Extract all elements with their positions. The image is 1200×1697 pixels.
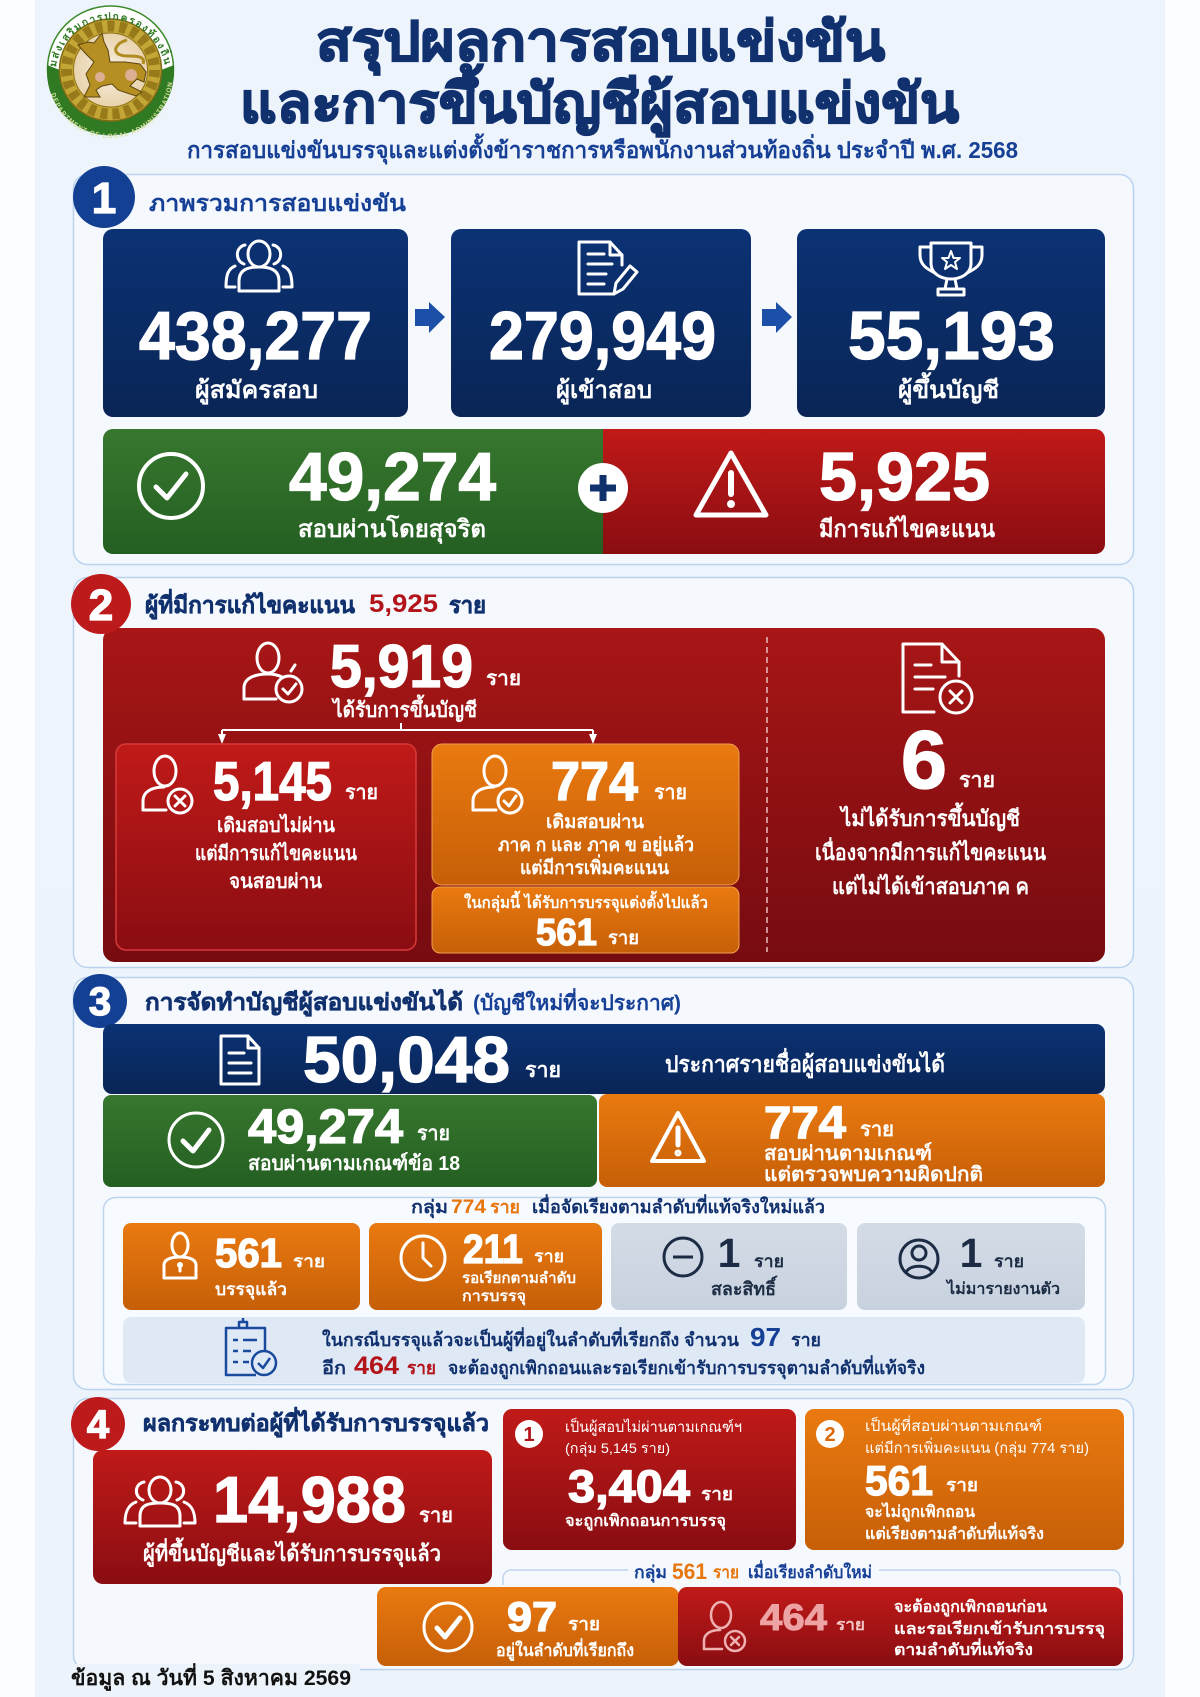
breakdown heading: กลุ่ม <box>411 1197 448 1219</box>
card: 211 waiting: 211 <box>463 1226 523 1272</box>
banner: passed honestly <box>103 429 603 554</box>
divider label: group 561: กลุ่ม <box>634 1563 667 1583</box>
card: 774: แต่มีการเพิ่มคะแนน <box>520 854 669 879</box>
bar: 50,048: ราย <box>525 1059 561 1082</box>
number badge 1 <box>515 1420 543 1448</box>
note box: จะต้องถูกเพิกถอนและรอเรียกเข้ารับการบรรจุตามลำดับที่แท้จริง <box>448 1355 925 1380</box>
heading: edited scores: ผู้ที่มีการแก้ไขคะแนน <box>145 588 355 620</box>
block: 6 not listed: ไม่ได้รับการขึ้นบัญชี <box>839 802 1020 832</box>
card: 464: และรอเรียกเข้ารับการบรรจุ <box>894 1619 1105 1639</box>
title: และการขึ้นบัญชีผู้สอบแข่งขัน <box>240 64 959 137</box>
card: 5,145: จนสอบผ่าน <box>229 871 322 893</box>
icon: user check <box>244 643 302 702</box>
card: 464: 464 <box>760 1597 827 1638</box>
number badge 2 <box>816 1420 844 1448</box>
subtitle: การสอบแข่งขันบรรจุและแต่งตั้งข้าราชการหรือพนักงานส่วนท้องถิ่น ประจำปี พ.ศ. 2568 <box>187 133 1018 165</box>
note box: 97 <box>750 1322 781 1352</box>
card: 561 placed <box>123 1223 360 1310</box>
card: listed: 55,193 <box>848 298 1055 374</box>
divider label: group 561 <box>503 1559 1120 1585</box>
heading: impact: ผลกระทบต่อผู้ที่ได้รับการบรรจุแล้ว <box>143 1406 489 1438</box>
card: item 1: จะถูกเพิกถอนการบรรจุ <box>565 1512 726 1532</box>
card: 561 appointed <box>432 887 739 954</box>
title <box>240 12 959 137</box>
note box <box>123 1317 1085 1383</box>
main red card: 5,919 <box>330 633 473 700</box>
icon: warning triangle <box>652 1113 704 1161</box>
card: 211 waiting: การบรรจุ <box>462 1288 526 1306</box>
panel: section 3 <box>73 974 1134 1390</box>
card: applicants <box>103 229 408 417</box>
card: 774 irregular: ราย <box>860 1119 894 1141</box>
bar: 50,048 <box>103 1023 1105 1096</box>
card: 561 appointed: ราย <box>608 928 639 949</box>
card: 14,988: 14,988 <box>213 1463 406 1536</box>
card: item 2: 561 <box>865 1457 933 1504</box>
heading: edited scores: 5,925 <box>369 590 438 618</box>
icon: people <box>226 241 292 291</box>
breakdown heading: ราย <box>490 1197 520 1217</box>
heading: overview: ภาพรวมการสอบแข่งขัน <box>149 190 406 216</box>
card: item 1 <box>503 1409 796 1550</box>
icon: user circle <box>900 1240 938 1278</box>
card: 774 irregular: สอบผ่านตามเกณฑ์ <box>764 1142 932 1165</box>
badge 4: 4 <box>87 1403 110 1447</box>
card: 1 no show: 1 <box>960 1230 982 1276</box>
card: 5,145: เดิมสอบไม่ผ่าน <box>217 813 335 837</box>
card: 774: เดิมสอบผ่าน <box>546 812 644 833</box>
icon: clipboard <box>226 1318 276 1375</box>
card: 464: จะต้องถูกเพิกถอนก่อน <box>894 1598 1047 1618</box>
card: 464: ตามลำดับที่แท้จริง <box>894 1638 1033 1659</box>
badge 4 <box>71 1397 125 1451</box>
card: 211 waiting: รอเรียกตามลำดับ <box>462 1270 576 1287</box>
icon: user x <box>704 1602 745 1651</box>
icon: warning triangle <box>696 453 766 515</box>
icon: document x <box>903 644 972 713</box>
card: 561 placed: บรรจุแล้ว <box>215 1280 287 1300</box>
icon: user lock <box>164 1233 196 1278</box>
card: 774: ภาค ก และ ภาค ข อยู่แล้ว <box>498 834 694 857</box>
card: 1 no show: ราย <box>994 1252 1024 1271</box>
card: 774 irregular: แต่ตรวจพบความผิดปกติ <box>764 1164 983 1186</box>
main red card: ราย <box>486 668 521 690</box>
card: 561 appointed: ในกลุ่มนี้ ได้รับการบรรจุแต่งตั้งไปแล้ว <box>464 890 708 913</box>
logo: department seal: กรมส่งเสริมการปกครองท้องถิ่น <box>50 12 172 66</box>
block: 6 not listed: แต่ไม่ได้เข้าสอบภาค ค <box>832 873 1029 899</box>
banner: passed honestly: สอบผ่านโดยสุจริต <box>298 514 486 545</box>
card: 774: ราย <box>654 782 687 804</box>
note box: อีก <box>322 1358 346 1378</box>
card: item 1: (กลุ่ม 5,145 ราย) <box>565 1440 670 1457</box>
card: 774: 774 <box>551 750 638 812</box>
card: item 1: 3,404 <box>568 1461 690 1512</box>
panel: section 1 overview <box>73 166 1134 564</box>
card: 97: ราย <box>568 1614 600 1634</box>
card: item 2: จะไม่ถูกเพิกถอน <box>865 1502 975 1523</box>
banner: score edited: 5,925 <box>819 439 990 515</box>
note box: 464 <box>354 1352 399 1380</box>
card: 1 waived: 1 <box>718 1230 740 1276</box>
card: applicants: 438,277 <box>139 298 372 374</box>
card: attended <box>451 229 751 417</box>
card: applicants: ผู้สมัครสอบ <box>195 377 318 405</box>
badge 2 <box>71 574 131 634</box>
heading: edited scores: ราย <box>449 592 486 618</box>
heading: list: การจัดทำบัญชีผู้สอบแข่งขันได้ <box>145 988 463 1017</box>
block: 6 not listed <box>815 644 1046 899</box>
bar: 50,048: 50,048 <box>303 1023 510 1096</box>
icon: clock <box>401 1236 445 1280</box>
icon: document <box>221 1036 259 1084</box>
card: item 2 <box>805 1409 1124 1550</box>
heading: list <box>145 987 681 1017</box>
note box: ในกรณีบรรจุแล้วจะเป็นผู้ที่อยู่ในลำดับที่เรียกถึง จำนวน <box>322 1327 740 1352</box>
icon: plus <box>578 463 628 513</box>
logo: department seal <box>46 5 174 138</box>
card: 5,145: 5,145 <box>213 750 332 812</box>
card: 774 <box>432 744 739 885</box>
card: 464 <box>678 1587 1123 1666</box>
card: 97: 97 <box>507 1593 557 1640</box>
card: item 2: เป็นผู้ที่สอบผ่านตามเกณฑ์ <box>865 1415 1042 1435</box>
card: 211 waiting <box>369 1223 602 1310</box>
arrow <box>415 302 445 333</box>
icon: check circle <box>169 1113 223 1167</box>
card: 5,145 <box>116 744 416 950</box>
block: 6 not listed: 6 <box>901 713 947 806</box>
card: 1 waived: สละสิทธิ์ <box>711 1275 778 1299</box>
card: 774 irregular: 774 <box>764 1097 846 1148</box>
badge 2: 2 <box>89 581 113 630</box>
card: 1 no show <box>857 1223 1085 1310</box>
note box: ราย <box>407 1358 436 1378</box>
icon: check circle <box>139 454 203 518</box>
card: 49,274 <box>103 1095 597 1187</box>
card: 774 irregular <box>599 1094 1105 1187</box>
card: 561 appointed: 561 <box>536 912 597 954</box>
breakdown heading: เมื่อจัดเรียงตามลำดับที่แท้จริงใหม่แล้ว <box>532 1194 825 1217</box>
bar: 50,048: ประกาศรายชื่อผู้สอบแข่งขันได้ <box>665 1047 945 1079</box>
inner panel: 774 breakdown <box>104 1194 1106 1384</box>
breakdown heading: 774 <box>451 1197 486 1218</box>
panel: section 4 <box>71 1397 1134 1670</box>
main red card <box>103 628 1105 962</box>
card: 5,145: แต่มีการแก้ไขคะแนน <box>195 841 357 865</box>
arrow: split <box>218 723 597 744</box>
card: 561 placed: 561 <box>215 1230 282 1276</box>
block: 6 not listed: ราย <box>959 769 995 792</box>
card: item 2: แต่เรียงตามลำดับที่แท้จริง <box>865 1522 1044 1543</box>
card: 49,274: 49,274 <box>248 1101 403 1154</box>
card: 14,988 <box>93 1450 492 1584</box>
card: attended: 279,949 <box>489 298 716 374</box>
card: 1 waived <box>611 1223 847 1310</box>
card: item 2: ราย <box>946 1475 978 1495</box>
panel: section 2 <box>71 574 1134 968</box>
icon: trophy <box>920 243 982 295</box>
title: สรุปผลการสอบแข่งขัน <box>316 12 885 76</box>
icon: user check <box>473 756 522 813</box>
card: 561 placed: ราย <box>293 1252 325 1271</box>
heading: edited scores <box>145 588 486 620</box>
heading: list: (บัญชีใหม่ที่จะประกาศ) <box>473 987 681 1016</box>
main red card: ได้รับการขึ้นบัญชี <box>331 694 477 723</box>
card: 1 waived: ราย <box>754 1252 784 1271</box>
footer: data date: ข้อมูล ณ วันที่ 5 สิงหาคม 2569 <box>71 1662 351 1692</box>
badge 1 <box>73 166 135 228</box>
card: 1 no show: ไม่มารายงานตัว <box>945 1279 1060 1298</box>
icon: document with pencil <box>579 242 637 294</box>
icon: user x <box>143 756 192 813</box>
card: 14,988: ราย <box>419 1505 453 1527</box>
number badge 1: 1 <box>523 1424 535 1446</box>
icon: people <box>125 1477 195 1526</box>
logo: department seal: DEPARTMENT OF LOCAL ADMINISTRATION <box>51 82 172 138</box>
divider label: group 561: ราย <box>713 1563 739 1582</box>
card: item 1: ราย <box>701 1484 733 1504</box>
card: 49,274: สอบผ่านตามเกณฑ์ข้อ 18 <box>248 1152 460 1175</box>
card: listed: ผู้ขึ้นบัญชี <box>898 371 999 405</box>
number badge 2: 2 <box>824 1424 836 1446</box>
card: 97 <box>377 1587 679 1666</box>
badge 3: 3 <box>89 980 111 1024</box>
badge 3 <box>73 974 127 1028</box>
card: 211 waiting: ราย <box>534 1247 564 1266</box>
icon: check circle <box>424 1603 472 1651</box>
card: 49,274: ราย <box>417 1123 450 1145</box>
divider label: group 561: เมื่อเรียงลำดับใหม่ <box>748 1560 872 1582</box>
card: item 2: แต่มีการเพิ่มคะแนน (กลุ่ม 774 ราย) <box>865 1437 1089 1458</box>
card: 97: อยู่ในลำดับที่เรียกถึง <box>496 1638 634 1662</box>
card: 14,988: ผู้ที่ขึ้นบัญชีและได้รับการบรรจุแล้ว <box>143 1537 441 1568</box>
badge 1: 1 <box>92 174 116 223</box>
card: 5,145: ราย <box>345 782 378 804</box>
card: 464: ราย <box>836 1617 865 1634</box>
block: 6 not listed: เนื่องจากมีการแก้ไขคะแนน <box>815 836 1046 865</box>
banner: passed honestly: 49,274 <box>289 439 496 515</box>
footer: data date <box>60 1662 360 1694</box>
banner: score edited <box>603 429 1105 554</box>
banner: score edited: มีการแก้ไขคะแนน <box>819 514 996 543</box>
icon: minus circle <box>664 1238 702 1276</box>
breakdown heading <box>411 1194 825 1219</box>
card: item 1: เป็นผู้สอบไม่ผ่านตามเกณฑ์ฯ <box>565 1417 742 1436</box>
card: attended: ผู้เข้าสอบ <box>556 377 652 405</box>
divider label: group 561: 561 <box>672 1559 707 1584</box>
arrow <box>762 302 792 333</box>
card: listed <box>797 229 1105 417</box>
note box: ราย <box>791 1330 821 1350</box>
